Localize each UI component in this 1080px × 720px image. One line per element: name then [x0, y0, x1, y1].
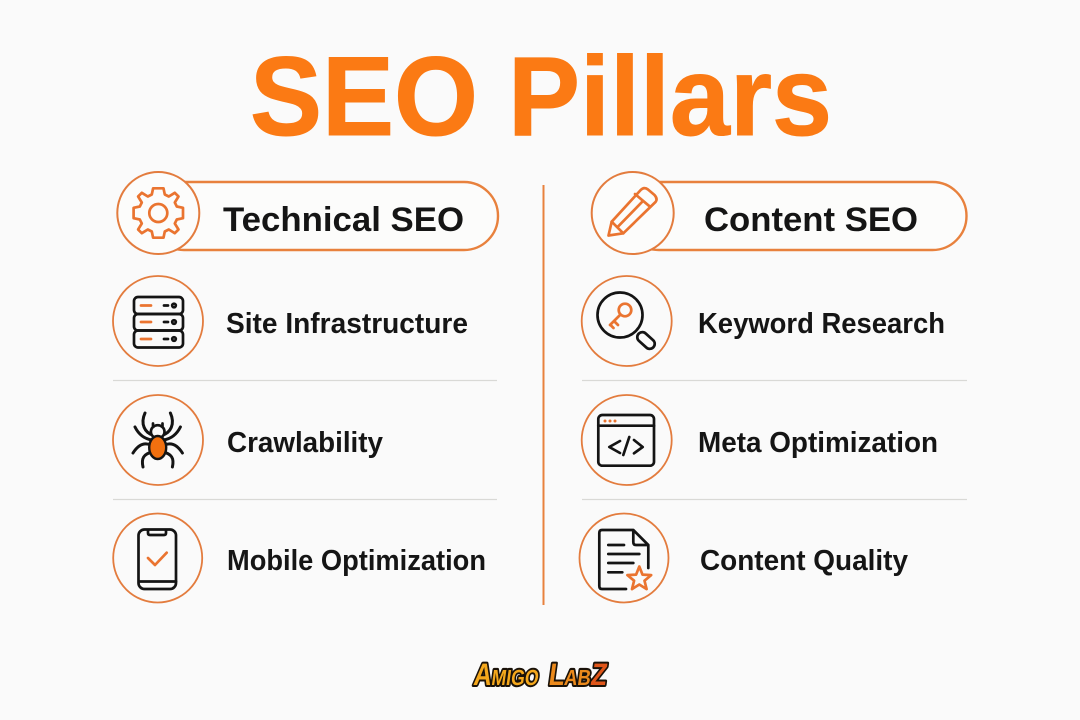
list item: Mobile Optimization: Mobile Optimization	[227, 545, 486, 577]
list item: Mobile Optimization	[113, 514, 486, 602]
icon: server stack	[134, 297, 183, 348]
center vertical divider	[542, 185, 544, 605]
list item: Crawlability: Crawlability	[227, 427, 383, 459]
heading pill: Content SEO: Content SEO	[704, 201, 918, 239]
icon: magnifier with key	[598, 292, 657, 351]
icon: document with star	[599, 530, 651, 589]
list item: Site Infrastructure	[113, 276, 468, 366]
list item: Keyword Research	[582, 276, 945, 366]
icon: code browser window	[598, 415, 654, 466]
heading pill: Content SEO	[592, 172, 966, 254]
list item: Meta Optimization: Meta Optimization	[698, 427, 938, 459]
heading pill: Technical SEO: Technical SEO	[223, 201, 464, 239]
title: SEO Pillars	[250, 34, 832, 159]
logo: Amigo LabZ	[472, 657, 610, 692]
list item: Keyword Research: Keyword Research	[698, 308, 945, 340]
icon: gear	[134, 188, 183, 238]
list item: Crawlability	[113, 395, 383, 485]
icon: spider	[133, 413, 182, 467]
list item: Meta Optimization	[582, 395, 938, 485]
icon: pencil	[608, 188, 657, 236]
list item: Content Quality: Content Quality	[700, 545, 908, 577]
logo: Amigo LabZ: Amigo	[472, 657, 542, 692]
list item: Content Quality	[580, 514, 908, 602]
icon: phone with check	[138, 530, 176, 589]
panel: Content SEO column	[580, 172, 967, 602]
list item: Site Infrastructure: Site Infrastructure	[226, 308, 468, 340]
heading pill: Technical SEO	[117, 172, 498, 254]
logo: Amigo LabZ: LabZ	[547, 657, 610, 692]
panel: Technical SEO column	[113, 172, 498, 602]
